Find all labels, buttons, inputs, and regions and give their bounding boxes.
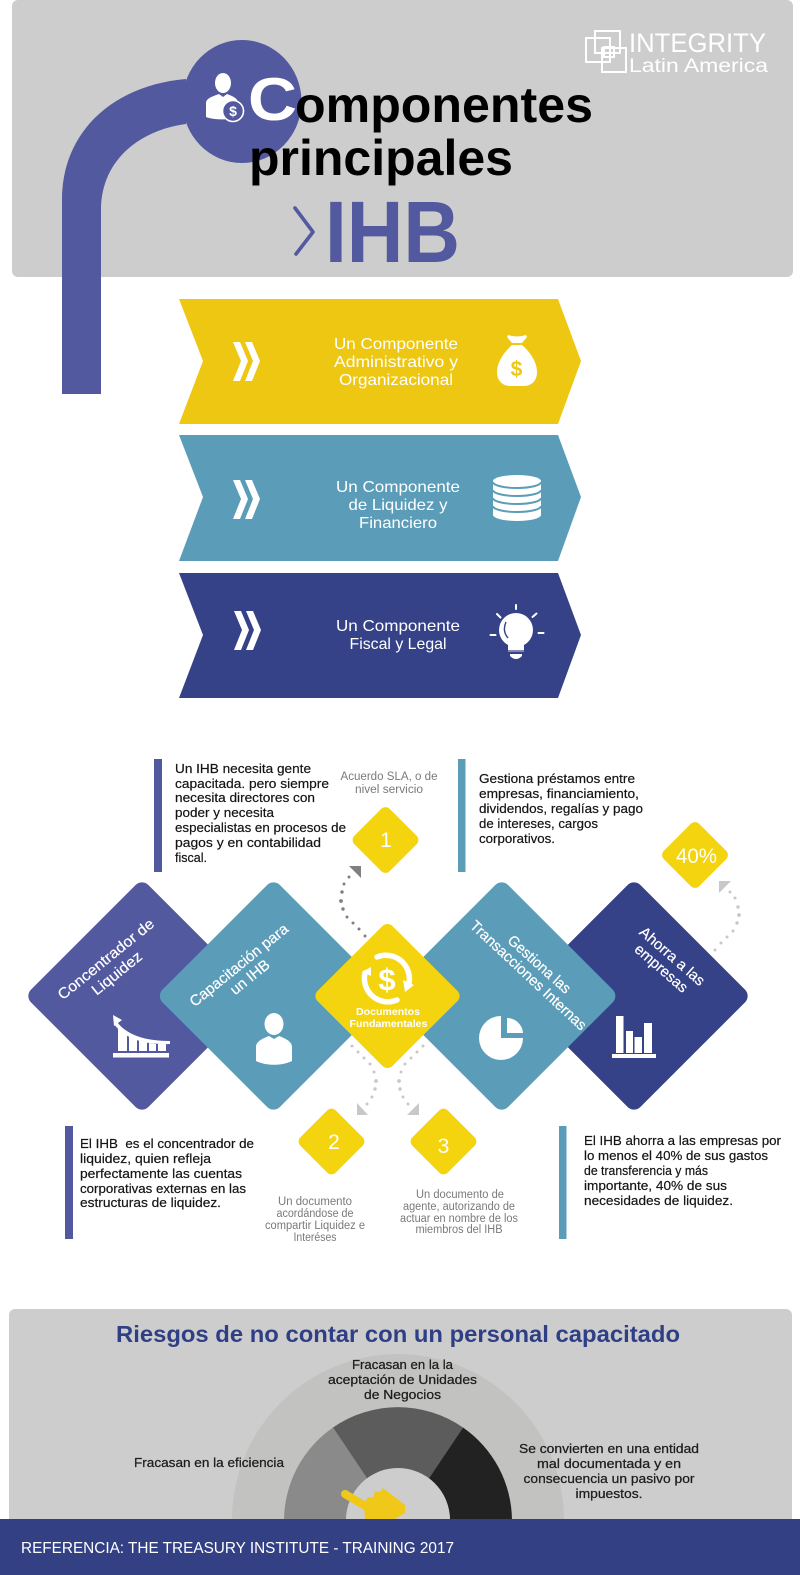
label: Financiero — [359, 515, 437, 532]
panel: header — [12, 0, 793, 277]
label: Liquidez — [89, 948, 146, 999]
caption: document 2: Interéses — [294, 1232, 337, 1244]
icon: money bag: $ — [511, 358, 523, 381]
icon: light bulb — [490, 605, 544, 659]
title: C — [248, 66, 297, 133]
badge: 3: 3 — [438, 1135, 449, 1158]
note: training — [154, 759, 346, 872]
risk label: right — [519, 1441, 699, 1501]
icon: double chevron — [233, 480, 260, 519]
risk label: right: mal documentada y en — [537, 1456, 681, 1471]
note: concentrador: perfectamente las cuentas — [80, 1166, 242, 1181]
risk label: right: Se convierten en una entidad — [519, 1441, 699, 1456]
logo: Integrity Latin America: INTEGRITY — [629, 28, 766, 58]
label: empresas — [631, 941, 691, 996]
note: ahorro: de transferencia y más — [584, 1163, 708, 1178]
heading: Riesgos de no contar con un personal capacitado — [116, 1321, 680, 1347]
label — [334, 336, 458, 389]
note: training: pagos y en contabilidad — [175, 835, 321, 850]
note: transactions: Gestiona préstamos entre — [479, 771, 635, 786]
caption: document 2: acordándose de — [276, 1208, 354, 1220]
title: principales — [249, 130, 513, 186]
risk label: top: aceptación de Unidades — [328, 1372, 477, 1387]
note: ahorro — [559, 1126, 782, 1239]
caption: SLA: Acuerdo SLA, o de — [340, 771, 438, 783]
arrow: center to 2 — [350, 1044, 378, 1115]
icon: double chevron — [234, 611, 261, 650]
note: ahorro: lo menos el 40% de sus gastos — [584, 1148, 768, 1163]
note: ahorro: necesidades de liquidez. — [584, 1193, 733, 1208]
label: Documentos — [356, 1006, 420, 1018]
note: training: fiscal. — [175, 850, 207, 865]
note: ahorro: El IHB ahorra a las empresas por — [584, 1133, 782, 1148]
badge: 3 — [408, 1106, 479, 1177]
banner: fiscal — [179, 573, 581, 698]
note: transactions: corporativos. — [479, 831, 555, 846]
risk label: top: Fracasan en la la — [352, 1357, 454, 1372]
diamond: concentrador — [25, 879, 259, 1113]
note: concentrador: El IHB es el concentrador de — [80, 1136, 254, 1151]
note: transactions — [458, 759, 643, 872]
label: Un Componente — [334, 336, 458, 353]
note: training: Un IHB necesita gente — [175, 761, 311, 776]
risk label: top — [328, 1357, 477, 1402]
note: training: especialistas en procesos de — [175, 820, 346, 835]
label: Gestiona las — [504, 932, 574, 997]
arrow: center to 3 — [397, 1044, 424, 1115]
arrow: center to 1 — [339, 866, 366, 938]
note: training: capacitada. pero siempre — [175, 776, 329, 791]
risk label: top: de Negocios — [364, 1387, 441, 1402]
badge: 1: 1 — [380, 829, 392, 852]
note: training: necesita directores con — [175, 790, 315, 805]
label: Fundamentales — [350, 1018, 428, 1030]
risk label: left: Fracasan en la eficiencia — [134, 1455, 285, 1470]
note: transactions: de intereses, cargos — [479, 816, 598, 831]
badge: 40%: 40% — [676, 845, 717, 868]
badge: 1 — [350, 805, 421, 875]
icon circle — [182, 40, 302, 163]
title: omponentes — [295, 77, 593, 133]
label: Concentrador de — [55, 915, 158, 1004]
footer: reference: REFERENCIA: THE TREASURY INSTITUTE - TRAINING 2017 — [21, 1540, 454, 1557]
label — [350, 1006, 428, 1030]
icon: money bag — [497, 335, 537, 386]
label: Administrativo y — [334, 354, 458, 371]
icon: double chevron — [233, 342, 260, 381]
badge: 2: 2 — [328, 1131, 340, 1154]
logo: Integrity Latin America: Latin America — [629, 56, 769, 77]
note: transactions: dividendos, regalías y pago — [479, 801, 643, 816]
label: Un Componente — [336, 479, 460, 496]
arrow: to 40% — [714, 881, 741, 952]
note: concentrador — [65, 1126, 254, 1239]
caption: document 3 — [400, 1189, 518, 1236]
icon: coin stack — [493, 475, 541, 521]
icon: pie chart — [479, 1016, 523, 1060]
gauge chart — [232, 1354, 564, 1520]
caption: document 3: actuar en nombre de los — [400, 1213, 518, 1225]
label — [336, 479, 460, 532]
note: concentrador: corporativas externas en las — [80, 1181, 246, 1196]
note: concentrador: liquidez, quien refleja — [80, 1151, 212, 1166]
note: ahorro: importante, 40% de sus — [584, 1178, 727, 1193]
label: Fiscal y Legal — [350, 636, 446, 653]
caption: document 3: agente, autorizando de — [403, 1201, 515, 1213]
label: Ahorra a las — [636, 924, 708, 990]
caption: document 2: Un documento — [278, 1196, 352, 1208]
icon: person — [256, 1013, 292, 1065]
icon: circular arrows with dollar — [362, 955, 414, 1002]
caption: document 3: Un documento de — [416, 1189, 504, 1201]
diamond: capacitacion — [156, 879, 391, 1113]
diamond: gestiona — [384, 879, 619, 1113]
risk label: right: impuestos. — [576, 1486, 642, 1501]
caption: document 2 — [265, 1196, 365, 1244]
label: Un Componente — [336, 618, 460, 635]
label: de Liquidez y — [348, 497, 448, 514]
label — [336, 618, 460, 653]
caption: document 3: miembros del IHB — [416, 1224, 503, 1236]
diamond: ahorra — [517, 879, 751, 1113]
panel: risks — [9, 1309, 792, 1525]
logo: Integrity Latin America — [586, 28, 769, 77]
caption: document 2: compartir Liquidez e — [265, 1220, 365, 1232]
footer: reference — [0, 1519, 800, 1575]
banner: liquidity — [179, 435, 581, 561]
icon: declining chart — [113, 1015, 170, 1058]
label: Capacitación para — [186, 920, 292, 1010]
connector tube — [62, 79, 186, 394]
badge: 40% — [660, 820, 730, 890]
note: transactions: empresas, financiamiento, — [479, 786, 639, 801]
title — [248, 66, 593, 186]
subtitle: IHB: IHB — [325, 184, 460, 281]
note: training: poder y necesita — [175, 805, 275, 820]
diamond: documentos fundamentales — [313, 921, 462, 1071]
badge: 2 — [296, 1106, 367, 1177]
label: Organizacional — [339, 372, 453, 389]
icon: circular arrows with dollar: $ — [378, 962, 396, 997]
caption: SLA: nivel servicio — [355, 784, 423, 796]
label: Transacciones Internas — [466, 917, 590, 1034]
risk label: right: consecuencia un pasivo por — [524, 1471, 695, 1486]
banner: administrative — [179, 299, 581, 424]
icon: bar chart — [612, 1016, 656, 1058]
note: concentrador: estructuras de liquidez. — [80, 1195, 221, 1210]
label: un IHB — [227, 956, 273, 999]
icon: pointing hand — [345, 1488, 405, 1520]
caption: SLA — [340, 771, 438, 796]
icon: person with money: $ — [229, 103, 237, 119]
